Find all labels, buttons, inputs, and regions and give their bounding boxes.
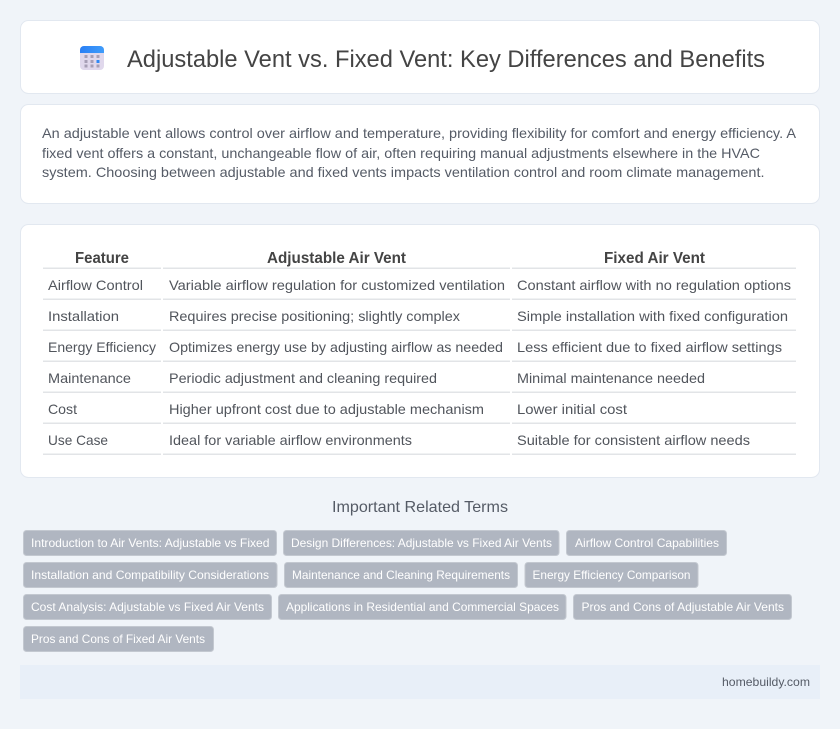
row: airflow control: Airflow Control bbox=[48, 277, 143, 293]
row: energy efficiency: Optimizes energy use by adjusting airflow as needed bbox=[169, 339, 503, 355]
table header: Fixed Air Vent bbox=[604, 250, 706, 267]
heading: important related terms: Important Related Terms bbox=[332, 499, 508, 516]
row: installation: Requires precise positioning; slightly complex bbox=[169, 308, 460, 324]
tag bbox=[24, 626, 214, 652]
related term tags bbox=[24, 530, 792, 652]
row: energy efficiency: Energy Efficiency bbox=[48, 339, 156, 355]
row: cost: Lower initial cost bbox=[517, 401, 627, 417]
tag bbox=[284, 530, 559, 556]
tag bbox=[278, 594, 566, 620]
panel: header bbox=[20, 20, 820, 94]
row: maintenance: Minimal maintenance needed bbox=[517, 370, 705, 386]
footer bbox=[20, 665, 820, 699]
row: use case bbox=[48, 432, 750, 448]
tag bbox=[24, 594, 272, 620]
tag: Applications in Residential and Commercial Spaces bbox=[286, 600, 559, 614]
panel: intro text: An adjustable vent allows control over airflow and temperature, providing flexibility for comfort and energy efficiency. A bbox=[42, 125, 797, 141]
tag: Maintenance and Cleaning Requirements bbox=[292, 568, 510, 582]
row: use case: Use Case bbox=[48, 432, 108, 448]
title: Adjustable Vent vs. Fixed Vent: Key Differences and Benefits bbox=[127, 46, 765, 73]
row: energy efficiency: Less efficient due to fixed airflow settings bbox=[517, 339, 782, 355]
tag bbox=[525, 562, 698, 588]
row: cost: Higher upfront cost due to adjustable mechanism bbox=[169, 401, 484, 417]
row: maintenance: Maintenance bbox=[48, 370, 131, 386]
panel: intro text bbox=[20, 104, 820, 204]
tag: Installation and Compatibility Considerations bbox=[31, 568, 269, 582]
tag bbox=[284, 562, 518, 588]
panel: comparison table bbox=[20, 224, 820, 478]
tag bbox=[566, 530, 726, 556]
row: cost: Cost bbox=[48, 401, 77, 417]
row: installation bbox=[48, 308, 788, 324]
row: maintenance bbox=[48, 370, 705, 386]
panel: intro text: system. Choosing between adjustable and fixed vents impacts ventilation control and room climate management. bbox=[42, 164, 764, 180]
icon: calendar grid bbox=[80, 46, 104, 70]
row: cost bbox=[48, 401, 627, 417]
tag bbox=[24, 530, 276, 556]
tag: Cost Analysis: Adjustable vs Fixed Air Vents bbox=[31, 600, 264, 614]
tag: Pros and Cons of Adjustable Air Vents bbox=[582, 600, 784, 614]
row: installation: Simple installation with fixed configuration bbox=[517, 308, 788, 324]
footer: homebuildy.com bbox=[722, 675, 810, 689]
row: installation: Installation bbox=[48, 308, 119, 324]
tag: Airflow Control Capabilities bbox=[575, 536, 719, 550]
tag: Design Differences: Adjustable vs Fixed Air Vents bbox=[291, 536, 552, 550]
tag bbox=[24, 562, 277, 588]
table header: Adjustable Air Vent bbox=[267, 250, 407, 267]
row: airflow control: Constant airflow with no regulation options bbox=[517, 277, 791, 293]
tag: Pros and Cons of Fixed Air Vents bbox=[31, 632, 205, 646]
row: airflow control: Variable airflow regulation for customized ventilation bbox=[169, 277, 505, 293]
tag: Energy Efficiency Comparison bbox=[532, 568, 690, 582]
row: use case: Ideal for variable airflow environments bbox=[169, 432, 412, 448]
row: use case: Suitable for consistent airflow needs bbox=[517, 432, 750, 448]
row: airflow control bbox=[48, 277, 791, 293]
table header bbox=[75, 250, 706, 267]
tag bbox=[574, 594, 792, 620]
table header: Feature bbox=[75, 250, 129, 267]
row: maintenance: Periodic adjustment and cleaning required bbox=[169, 370, 437, 386]
tag: Introduction to Air Vents: Adjustable vs Fixed bbox=[31, 536, 270, 550]
panel: intro text: fixed vent offers a constant, unchangeable flow of air, often requiring manual adjustments elsewhere in the HVAC bbox=[42, 145, 760, 161]
row: energy efficiency bbox=[48, 339, 782, 355]
